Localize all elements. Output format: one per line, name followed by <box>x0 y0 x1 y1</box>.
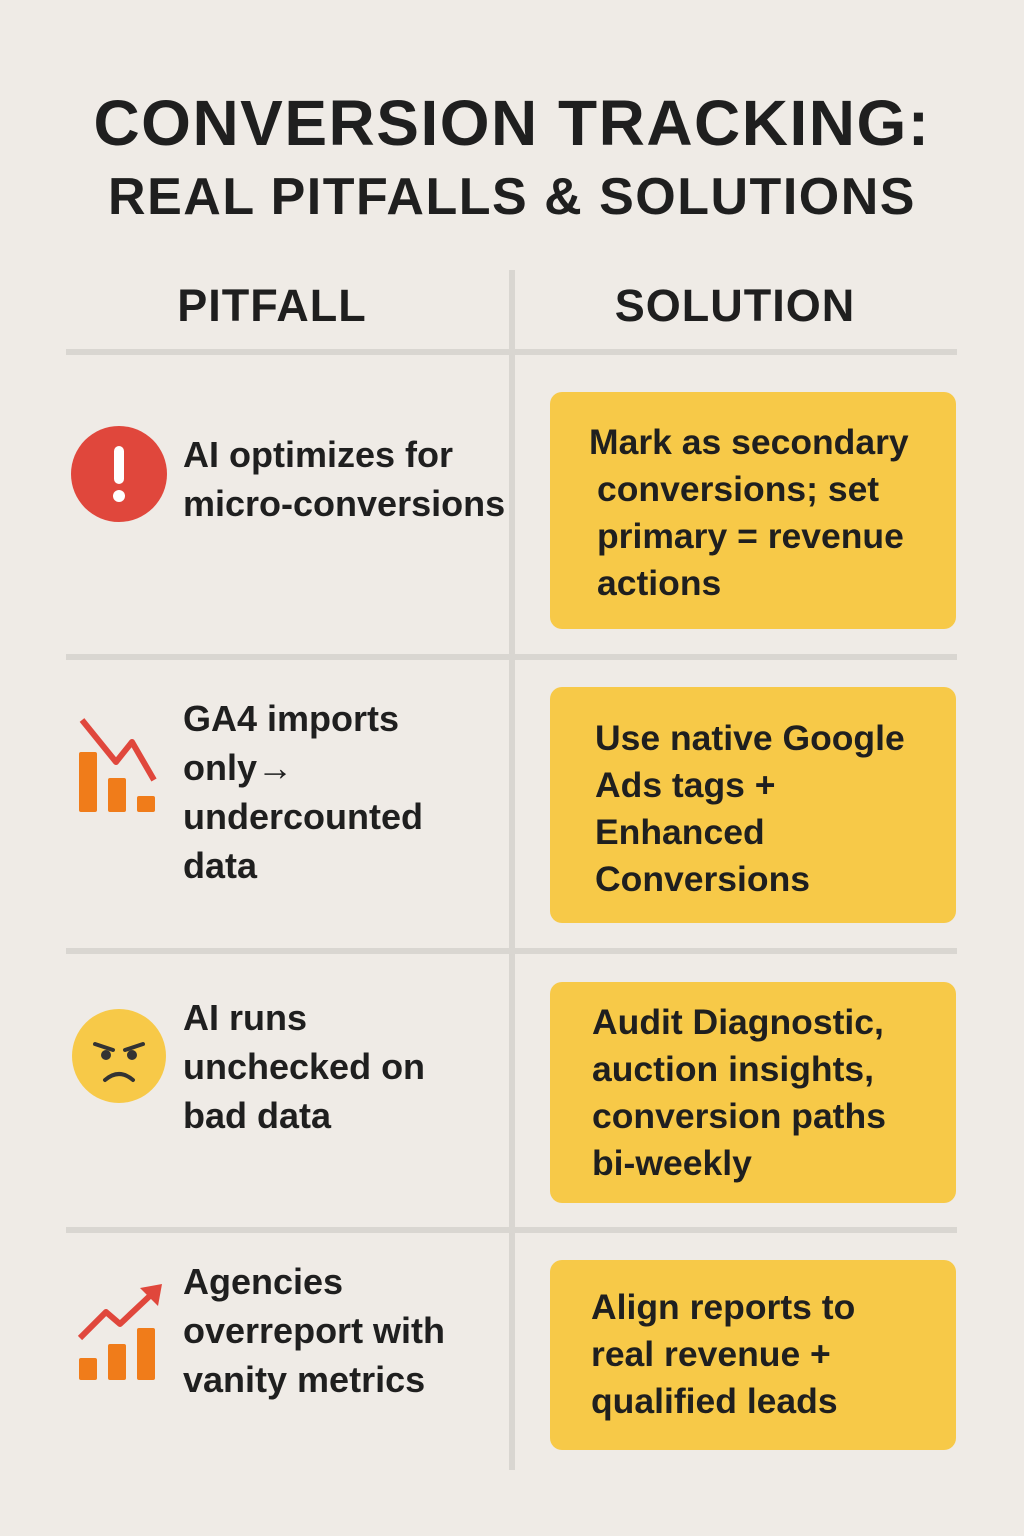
icon: declining chart <box>79 718 156 812</box>
pitfall 4: Agencies <box>183 1261 343 1302</box>
solution 2: Use native Google <box>595 718 905 758</box>
solution 2 <box>550 687 956 923</box>
solution 4: qualified leads <box>591 1381 838 1421</box>
header: solution: SOLUTION <box>615 280 855 331</box>
pitfall 3: unchecked on <box>183 1046 425 1087</box>
solution 2: Conversions <box>595 859 810 899</box>
title: REAL PITFALLS & SOLUTIONS <box>108 168 916 226</box>
pitfall 2: GA4 imports <box>183 698 399 739</box>
pitfall 4: vanity metrics <box>183 1359 425 1400</box>
solution 3: conversion paths <box>592 1096 886 1136</box>
solution 4: real revenue + <box>591 1334 831 1374</box>
pitfall 2: undercounted <box>183 796 423 837</box>
pitfall 4: overreport with <box>183 1310 445 1351</box>
pitfall 2: only→ <box>183 747 293 788</box>
solution 4 <box>550 1260 956 1450</box>
pitfall 1: AI optimizes for <box>183 434 453 475</box>
solution 3: Audit Diagnostic, <box>592 1002 884 1042</box>
pitfall 1 <box>183 434 505 524</box>
solution 3: bi-weekly <box>592 1143 752 1183</box>
solution 1: primary = revenue <box>597 516 904 556</box>
pitfall 3 <box>183 997 425 1136</box>
pitfall 3: bad data <box>183 1095 331 1136</box>
pitfall 2 <box>183 698 423 886</box>
pitfall 3: AI runs <box>183 997 307 1038</box>
icon: rising chart <box>78 1284 162 1380</box>
solution 2: Ads tags + <box>595 765 776 805</box>
header: pitfall: PITFALL <box>177 280 367 331</box>
solution 1 <box>550 392 956 629</box>
solution 1: Mark as secondary <box>589 422 909 462</box>
icon: angry face <box>72 1009 166 1103</box>
title: CONVERSION TRACKING: <box>93 87 931 159</box>
solution 1: actions <box>597 563 721 603</box>
solution 3 <box>550 982 956 1203</box>
pitfall 1: micro-conversions <box>183 483 505 524</box>
solution 3: auction insights, <box>592 1049 874 1089</box>
icon: exclamation <box>71 426 167 522</box>
pitfall 2: data <box>183 845 257 886</box>
solution 2: Enhanced <box>595 812 765 852</box>
title <box>93 87 931 226</box>
solution 1: conversions; set <box>597 469 879 509</box>
solution 4: Align reports to <box>591 1287 855 1327</box>
pitfall 4 <box>183 1261 445 1400</box>
